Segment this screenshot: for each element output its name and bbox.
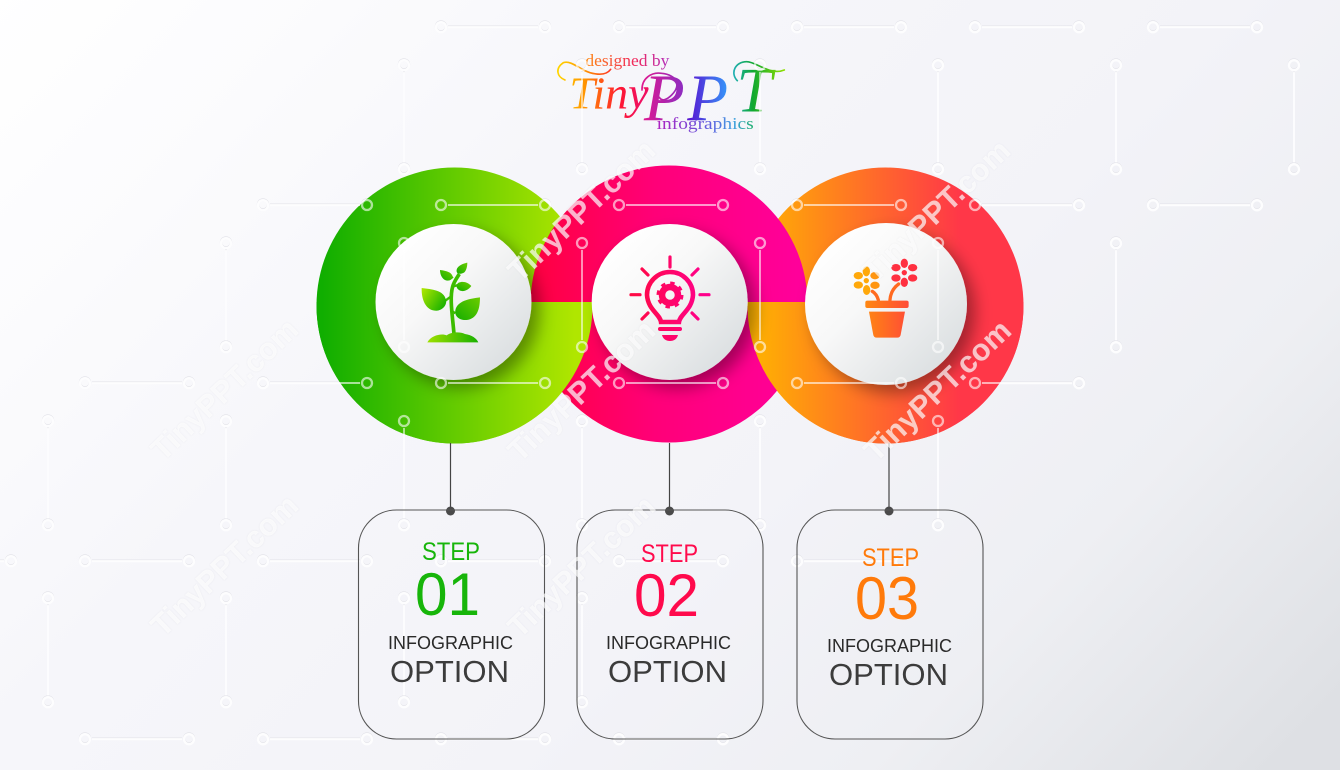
card title: OPTION [608,654,727,689]
logo T swash right [734,62,784,81]
connector: step 2 [665,443,674,516]
step label: STEP [641,540,698,568]
logo letter T: T [737,55,776,125]
icon: plant sprout [422,263,480,342]
icon: light bulb with gear [631,257,709,341]
watermark: TinyPPT.com [144,488,305,643]
connector: step 1 [446,443,455,516]
card caption: INFOGRAPHIC [606,632,731,653]
watermark: TinyPPT.com [144,312,305,467]
watermark: TinyPPT.com [501,133,662,288]
card caption: INFOGRAPHIC [388,632,513,653]
logo: designed by TinyPPT infographics [558,51,784,135]
card title: OPTION [829,657,948,692]
watermark: TinyPPT.com [501,313,662,468]
logo word Tiny: Tiny [569,68,649,119]
watermark: TinyPPT.com [857,313,1018,468]
connector: step 3 [884,443,894,516]
step label: STEP [862,544,919,572]
ring: green lower overlap [316,302,592,444]
card: step 02 [577,510,763,739]
ring: orange [748,168,1024,444]
icon: flower pot [854,259,917,338]
watermark: TinyPPT.com [856,133,1017,288]
logo T swash [558,62,611,80]
disc: step 2 [592,224,748,380]
logo subtitle: infographics [657,114,754,133]
step number: 03 [855,565,919,632]
logo letter P: P [643,62,685,135]
card title: OPTION [390,654,509,689]
disc: step 1 [376,224,532,380]
step number: 02 [634,562,699,629]
ring: green [316,168,592,444]
logo second P: P [686,62,728,135]
ring: pink [530,166,808,442]
logo tagline: designed by [585,51,670,70]
disc: step 3 [805,223,967,385]
step label: STEP [422,538,480,566]
logo P swash [642,73,677,100]
watermarks [144,133,1018,644]
rings: three interlocking circles [316,166,1024,444]
watermark: TinyPPT.com [501,489,662,644]
step number: 01 [415,561,480,628]
card caption: INFOGRAPHIC [827,635,952,656]
card: step 01 [358,510,544,739]
card: step 03 [797,510,983,739]
ring: orange lower overlap [748,302,1024,444]
